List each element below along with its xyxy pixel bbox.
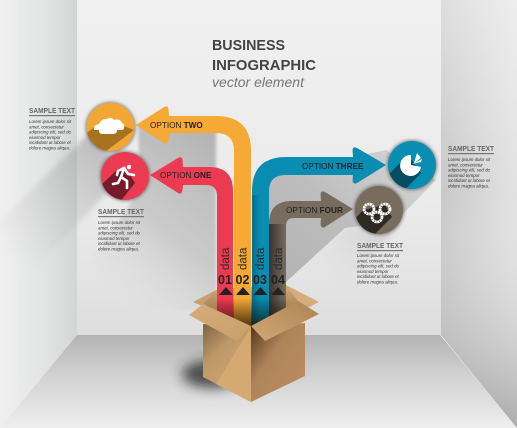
arrow: option three [252, 147, 386, 330]
text block: brown: Lorem ipsum dolor sit [357, 253, 400, 258]
circle: cloud [84, 102, 136, 153]
text block: red: incididunt ut labore et [98, 241, 141, 246]
title: BUSINESS [212, 37, 285, 54]
text block: red: adipiscing elit, sed do [98, 231, 141, 236]
text block: blue: Lorem ipsum dolor sit [448, 157, 491, 162]
text block: red: dolore magna aliqua. [98, 246, 139, 252]
text block: blue [448, 144, 494, 188]
text block: brown [357, 241, 403, 284]
arrow: option one [150, 157, 233, 330]
box back flaps [193, 285, 319, 330]
title: INFOGRAPHIC [212, 57, 316, 74]
icon: gears [364, 204, 390, 222]
text block: orange: SAMPLE TEXT [29, 106, 75, 115]
long shadows on the wall [0, 125, 436, 310]
text block: red: amet, consectetur [98, 225, 133, 230]
text block: orange [29, 106, 75, 150]
arrow: option two [136, 106, 251, 330]
text block: red: SAMPLE TEXT [98, 207, 144, 216]
text block: red [98, 207, 144, 252]
text block: orange: incididunt ut labore et [29, 140, 72, 145]
arrow: option four [269, 191, 353, 330]
text block: brown: adipiscing elit, sed do [357, 264, 400, 269]
circle: gears [352, 185, 404, 236]
column labels [218, 247, 285, 295]
label: option four: OPTION FOUR [286, 206, 343, 215]
cardboard box [189, 301, 319, 402]
text block: orange: Lorem ipsum dolor sit [29, 119, 72, 124]
text block: blue: SAMPLE TEXT [448, 144, 494, 153]
title: vector element [212, 74, 305, 90]
text block: brown: amet, consectetur [357, 258, 392, 263]
column fade into box [217, 298, 286, 330]
text block: brown: SAMPLE TEXT [357, 241, 403, 250]
label: option one: OPTION ONE [160, 171, 212, 180]
text block: brown: incididunt ut labore et [357, 274, 400, 279]
column labels: 02 [236, 273, 249, 287]
icon: runner [113, 165, 134, 188]
icon: cloud [94, 118, 124, 134]
text block: brown: eiusmod tempor [357, 269, 389, 274]
title [212, 37, 316, 90]
text block: red: eiusmod tempor [98, 236, 130, 241]
column labels: 01 [218, 273, 232, 287]
icon: pie chart [400, 155, 421, 176]
text block: orange: amet, consectetur [29, 124, 64, 129]
text block: orange: adipiscing elit, sed do [29, 130, 72, 135]
label: option three: OPTION THREE [302, 162, 364, 171]
column labels: 03 [253, 273, 267, 287]
text block: orange: dolore magna aliqua. [29, 146, 70, 150]
column labels: data [238, 247, 250, 270]
text block: red: Lorem ipsum dolor sit [98, 220, 141, 225]
circle: runner [98, 151, 150, 203]
text block: blue: adipiscing elit, sed do [448, 168, 491, 173]
text block: brown: dolore magna aliqua. [357, 280, 398, 284]
box shadow [182, 360, 242, 388]
text block: blue: amet, consectetur [448, 162, 483, 167]
label: option two: OPTION TWO [150, 121, 203, 130]
circle: pie chart [385, 140, 437, 192]
text block: blue: incididunt ut labore et [448, 178, 491, 183]
column labels: data [255, 247, 267, 270]
text block: orange: eiusmod tempor [29, 135, 61, 140]
column labels: 04 [271, 273, 285, 287]
text block: blue: dolore magna aliqua. [448, 184, 489, 188]
text block: blue: eiusmod tempor [448, 173, 480, 178]
column labels: data [273, 247, 285, 270]
column labels: data [220, 247, 232, 270]
